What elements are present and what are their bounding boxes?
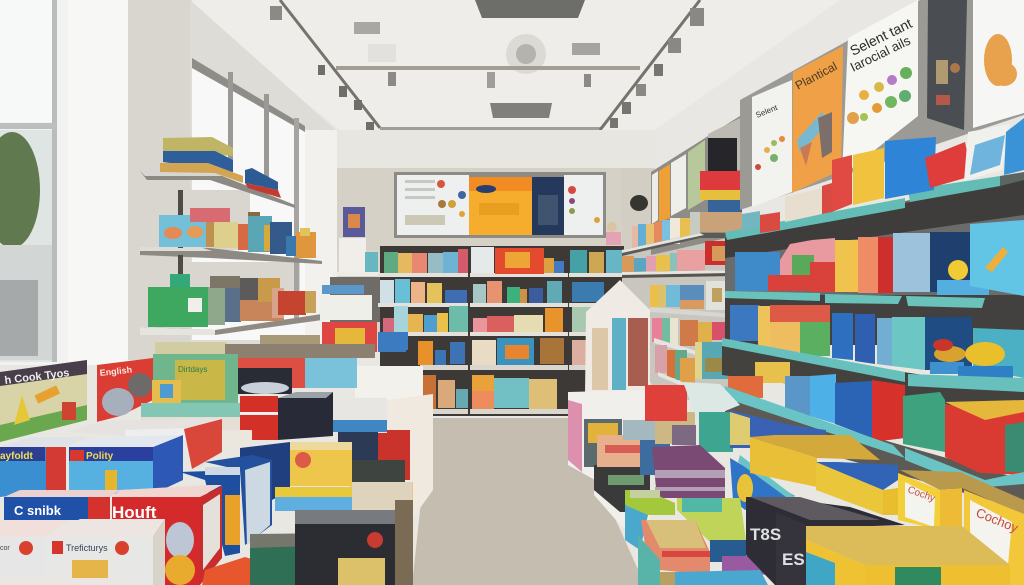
back shelving unit (378, 246, 624, 416)
left wall shelves (140, 137, 381, 355)
box: Toy Polity: Polity (86, 451, 114, 462)
box: green game (152, 354, 238, 403)
back wall (336, 130, 658, 350)
right fifth shelf with yellow and blue boxes (738, 435, 1024, 585)
right wall (655, 0, 1024, 240)
left window and pillar (0, 0, 192, 365)
poster: large white selection chart: Iarocial ails (848, 32, 913, 75)
white boxes: Treficturys: Treficturys (66, 543, 108, 553)
box: Houft (112, 485, 222, 585)
box: Cook Tyos: h Cook Tyos (4, 367, 70, 387)
books on top shelf (160, 137, 281, 198)
poster: mascot (973, 0, 1024, 128)
white boxes: Treficturys: cor (0, 545, 10, 552)
mid shelf three books (650, 281, 728, 310)
poster: white circles small: Selent (754, 103, 780, 120)
books row 2 (380, 279, 604, 303)
poster: orange: Plantical (793, 59, 839, 93)
box: red mascot: English (99, 365, 133, 378)
poster: dark (927, 0, 967, 130)
yellow-green box stack (677, 498, 746, 562)
blue emblem box (730, 458, 795, 510)
poster: large white selection chart (842, 0, 918, 176)
books row 1 (384, 247, 623, 274)
white storage boxes (332, 366, 433, 525)
right third shelf with boxes (722, 305, 1024, 415)
mid shelf two books (622, 241, 748, 274)
box: left blue toy: ayfoldt (0, 451, 33, 462)
mid right shelving (622, 116, 750, 400)
right second shelf with boxes (725, 220, 1024, 345)
boxes behind the rows (225, 332, 406, 394)
dark box with white base (594, 462, 650, 527)
right fifth shelf with yellow and blue boxes: Cochy (906, 484, 936, 505)
security camera (630, 195, 648, 211)
box: toy row red (70, 418, 222, 470)
right top shelf with books (725, 118, 1024, 300)
center floor stacks (568, 280, 826, 585)
display tower (585, 280, 650, 395)
teal picture box (695, 342, 750, 379)
small plush figure (606, 222, 621, 245)
box: Houft: Houft (112, 503, 157, 522)
left pile of boxes (0, 332, 433, 585)
back poster board (394, 172, 606, 238)
right fourth shelf with boxes (725, 362, 1024, 510)
books row 3 (383, 306, 592, 332)
yellow and teal boxes (275, 442, 412, 511)
lower boxes (202, 500, 413, 585)
poster: orange (792, 46, 843, 193)
white boxes: Treficturys (0, 519, 165, 585)
mid shelf one books (632, 212, 700, 248)
black and yellow floor boxes: ES (782, 550, 805, 569)
left wall and side windows (190, 0, 337, 350)
peach stack (638, 520, 710, 585)
right wall posters (740, 0, 1024, 210)
box: Snibk (4, 490, 120, 520)
boxes on middle shelf (159, 208, 316, 258)
mid shelf five books (655, 345, 695, 384)
box: Toy Polity (69, 435, 183, 494)
box: Snibk: C snibk (14, 503, 62, 518)
boxes on lower shelf (148, 274, 316, 327)
small wall-side display (155, 207, 381, 355)
box: Cook Tyos (0, 360, 87, 442)
black and yellow floor boxes (746, 497, 1010, 585)
books row 5 (422, 375, 557, 409)
box: red mascot (97, 358, 153, 422)
black and yellow floor boxes: T8S (750, 525, 781, 544)
floor (412, 418, 645, 585)
lime tub (625, 490, 675, 550)
poster: white circles small (752, 80, 792, 207)
right fifth shelf with yellow and blue boxes: Cochoy (974, 505, 1021, 535)
box: green game: Dirtdays (178, 365, 207, 374)
box: left blue toy (0, 437, 90, 497)
flat stacked boxes (141, 392, 333, 445)
poster: large white selection chart: Selent tant (847, 15, 915, 59)
mid shelf four books (652, 318, 730, 346)
books row 4 (380, 332, 596, 365)
tall blue boxes (180, 442, 290, 556)
display base (568, 390, 645, 480)
